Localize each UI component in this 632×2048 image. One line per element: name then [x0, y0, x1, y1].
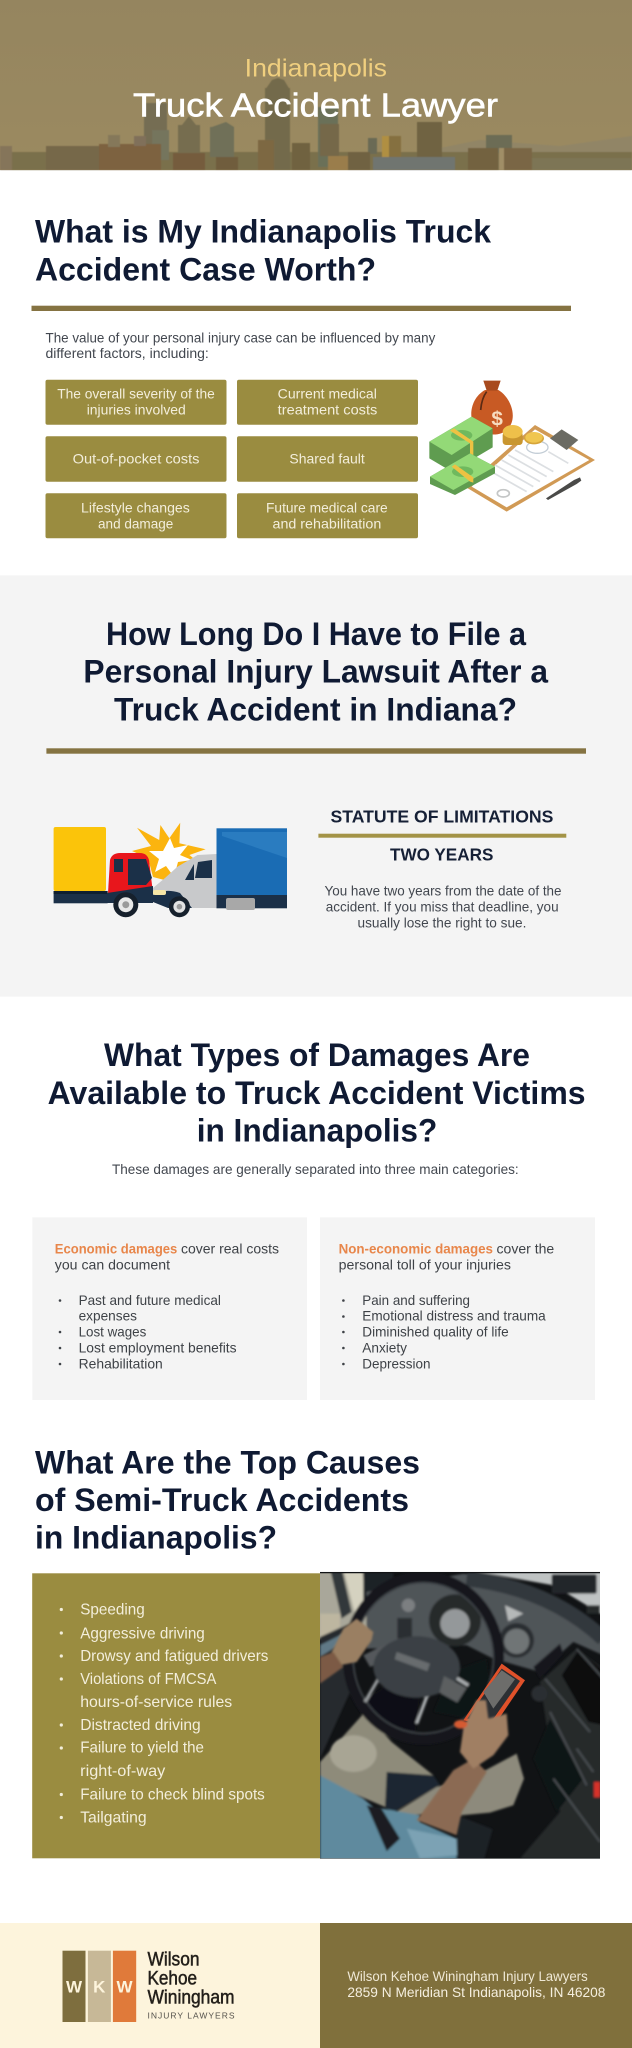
- panel: economic damages: cover real costs: [181, 1241, 279, 1257]
- panel: causes list: Distracted driving: [80, 1717, 201, 1734]
- logo wordmark: Wilson: [148, 1950, 200, 1971]
- panel: non-economic damages: cover the: [496, 1241, 554, 1257]
- logo wordmark: [148, 1950, 235, 2021]
- heading: damages: in Indianapolis?: [197, 1113, 437, 1149]
- section: filing deadline: [46, 616, 586, 931]
- panel: non-economic damages: [320, 1217, 595, 1400]
- panel: non-economic damages: Diminished quality of life: [362, 1324, 509, 1340]
- factor: lifestyle: [46, 493, 226, 538]
- statute title: STATUTE OF LIMITATIONS: [330, 807, 553, 827]
- panel: causes list: Tailgating: [80, 1809, 147, 1826]
- footer: logo panel: [0, 1923, 320, 2048]
- panel: non-economic damages: Anxiety: [362, 1339, 407, 1355]
- intro text: The value of your personal injury case can be influenced by many: [46, 329, 435, 345]
- panel: causes list: Violations of FMCSA: [80, 1671, 217, 1688]
- statute explanation: usually lose the right to sue.: [358, 915, 526, 931]
- damages subtitle: These damages are generally separated into three main categories:: [112, 1161, 519, 1177]
- factor: shared fault: [237, 436, 418, 482]
- footer: address panel: 2859 N Meridian St Indianapolis, IN 46208: [347, 1984, 606, 2000]
- illustration: truck collision: [54, 823, 287, 917]
- factor: severity: [46, 380, 226, 425]
- heading: causes: What Are the Top Causes: [35, 1444, 420, 1480]
- panel: causes list: Failure to check blind spots: [80, 1786, 265, 1803]
- heading: filing deadline: Personal Injury Lawsuit After a: [83, 654, 548, 690]
- panel: causes list: hours-of-service rules: [80, 1694, 232, 1711]
- heading: causes: of Semi-Truck Accidents: [35, 1482, 409, 1518]
- title: Truck Accident Lawyer: Truck Accident Lawyer: [133, 87, 498, 124]
- logo wordmark: Winingham: [148, 1988, 234, 2009]
- panel: non-economic damages: Depression: [362, 1355, 430, 1371]
- statute explanation: [324, 883, 562, 931]
- panel: economic damages: expenses: [79, 1308, 137, 1324]
- panel: causes list: Drowsy and fatigued drivers: [80, 1648, 268, 1665]
- heading: filing deadline: How Long Do I Have to File a: [106, 616, 526, 652]
- heading: causes: in Indianapolis?: [35, 1520, 277, 1556]
- factor: severity: The overall severity of the: [57, 386, 215, 402]
- logo wordmark: Kehoe: [148, 1969, 197, 1990]
- heading: filing deadline: [83, 616, 548, 728]
- panel: non-economic damages: Pain and suffering: [362, 1292, 470, 1308]
- icon: money and document: $: [491, 407, 503, 430]
- panel: non-economic damages: Non-economic damages: [339, 1241, 493, 1257]
- heading: case worth: [35, 214, 491, 288]
- title: Indianapolis: Indianapolis: [245, 55, 387, 83]
- panel: economic damages: Rehabilitation: [79, 1355, 163, 1371]
- panel: causes list: [32, 1573, 320, 1858]
- photo: driver using phone behind the wheel: [320, 1572, 600, 1859]
- footer: address panel: [320, 1923, 632, 2048]
- heading: damages: What Types of Damages Are: [104, 1037, 530, 1073]
- header banner: [0, 0, 632, 170]
- factor: future care: Future medical care: [266, 499, 388, 515]
- panel: causes list: Speeding: [80, 1602, 145, 1619]
- heading: damages: Available to Truck Accident Victims: [48, 1075, 586, 1111]
- factor: shared fault: Shared fault: [289, 451, 365, 467]
- panel: economic damages: Economic damages: [55, 1241, 177, 1257]
- factor: lifestyle: and damage: [98, 515, 174, 531]
- factor: current medical: [237, 380, 418, 425]
- factor: severity: injuries involved: [87, 402, 186, 418]
- factor: lifestyle: Lifestyle changes: [81, 499, 190, 515]
- logo mark WKW: W: [66, 1977, 83, 1996]
- icon: money and document: [429, 381, 595, 512]
- statute value: TWO YEARS: [390, 844, 493, 864]
- section: case worth: [32, 214, 595, 538]
- factor: current medical: treatment costs: [278, 402, 377, 418]
- panel: economic damages: you can document: [55, 1256, 170, 1272]
- panel: economic damages: Lost employment benefits: [79, 1339, 237, 1355]
- section: causes: [32, 1444, 603, 1862]
- panel: causes list: Failure to yield the: [80, 1740, 204, 1757]
- panel: causes list: Aggressive driving: [80, 1625, 205, 1642]
- section: statute background: [0, 575, 632, 997]
- statute explanation: accident. If you miss that deadline, you: [326, 899, 559, 915]
- logo mark WKW: [62, 1951, 136, 2022]
- factor: out-of-pocket: [46, 436, 226, 482]
- footer: address panel: Wilson Kehoe Winingham Injury Lawyers: [347, 1968, 588, 1984]
- section: damages: [32, 1037, 595, 1400]
- heading: damages: [48, 1037, 586, 1149]
- logo mark WKW: K: [93, 1977, 106, 1996]
- factor: out-of-pocket: Out-of-pocket costs: [73, 451, 200, 467]
- heading: filing deadline: Truck Accident in Indiana?: [114, 692, 517, 728]
- city skyline: [0, 78, 632, 170]
- panel: non-economic damages: personal toll of your injuries: [339, 1256, 511, 1272]
- panel: economic damages: Lost wages: [79, 1324, 146, 1340]
- logo wordmark: INJURY LAWYERS: [148, 2011, 235, 2021]
- panel: economic damages: Past and future medical: [79, 1292, 221, 1308]
- factor: future care: [237, 493, 418, 538]
- intro text: different factors, including:: [46, 345, 209, 361]
- logo mark WKW: W: [116, 1977, 133, 1996]
- heading: case worth: Accident Case Worth?: [35, 252, 376, 288]
- factor: future care: and rehabilitation: [272, 515, 381, 531]
- statute explanation: You have two years from the date of the: [324, 883, 562, 899]
- panel: causes list: right-of-way: [80, 1763, 165, 1780]
- panel: non-economic damages: Emotional distress and trauma: [362, 1308, 546, 1324]
- heading: case worth: What is My Indianapolis Truck: [35, 214, 491, 250]
- intro text: [46, 329, 435, 361]
- heading: causes: [35, 1444, 420, 1556]
- panel: economic damages: [32, 1217, 307, 1400]
- factor: current medical: Current medical: [278, 386, 377, 402]
